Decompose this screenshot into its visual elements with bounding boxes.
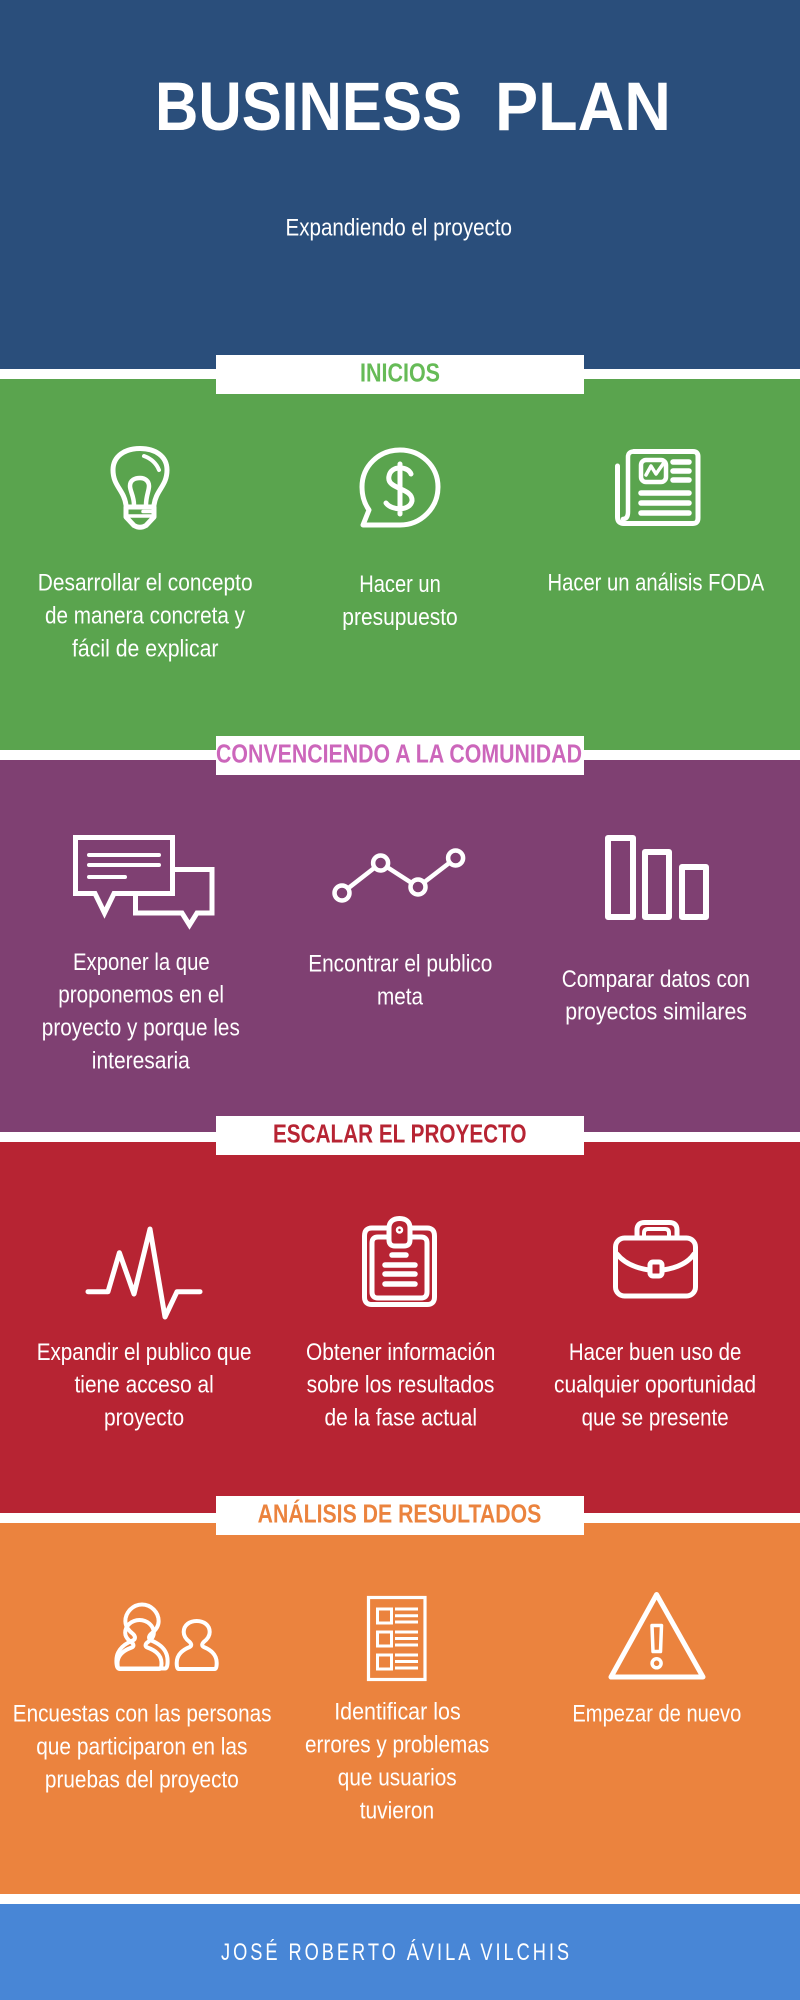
heading: analisis de resultados: ANÁLISIS DE RESULTADOS bbox=[258, 1500, 541, 1529]
text: SWOT analysis: Hacer un análisis FODA bbox=[548, 570, 764, 597]
panel: convenciendo a la comunidad bbox=[0, 736, 800, 1132]
subtitle: Expandiendo el proyecto bbox=[286, 214, 512, 242]
text: identify errors: tuvieron bbox=[360, 1798, 434, 1825]
text: surveys: que participaron en las bbox=[36, 1734, 248, 1761]
text: expose: proponemos en el bbox=[58, 982, 224, 1009]
text: concept: de manera concreta y bbox=[45, 603, 245, 630]
panel: analisis de resultados bbox=[0, 1496, 800, 1894]
text: surveys: pruebas del proyecto bbox=[45, 1767, 239, 1794]
title: PLAN bbox=[495, 68, 671, 145]
text: identify errors: que usuarios bbox=[338, 1765, 457, 1792]
icon: pulse line bbox=[88, 1229, 200, 1317]
icon: briefcase bbox=[616, 1222, 696, 1296]
icon: chat bubbles bbox=[76, 838, 212, 925]
text: target audience: meta bbox=[377, 983, 424, 1010]
text: get information: Obtener información bbox=[306, 1339, 495, 1366]
text: compare data bbox=[562, 966, 750, 1026]
icon: clipboard bbox=[364, 1218, 434, 1304]
text: concept: Desarrollar el concepto bbox=[38, 570, 253, 597]
text: expose: interesaria bbox=[92, 1048, 190, 1075]
text: identify errors: errores y problemas bbox=[305, 1732, 489, 1759]
text: budget bbox=[342, 571, 458, 631]
text: get information: sobre los resultados bbox=[307, 1372, 494, 1399]
icon: people bbox=[116, 1604, 217, 1669]
text: expand audience bbox=[37, 1339, 252, 1432]
text: identify errors bbox=[305, 1699, 489, 1825]
text: expose: proyecto y porque les bbox=[42, 1015, 240, 1042]
icon: newspaper bbox=[618, 452, 698, 524]
text: opportunity: cualquier oportunidad bbox=[554, 1372, 756, 1399]
text: expose bbox=[42, 949, 240, 1075]
text: identify errors: Identificar los bbox=[334, 1699, 461, 1726]
text: start over: Empezar de nuevo bbox=[572, 1701, 741, 1728]
icon: bar chart bbox=[608, 838, 706, 917]
text: target audience: Encontrar el publico bbox=[308, 951, 492, 978]
text: budget: presupuesto bbox=[342, 604, 458, 631]
icon: line chart bbox=[334, 850, 463, 900]
title bbox=[155, 68, 671, 145]
heading: escalar el proyecto bbox=[216, 1116, 584, 1155]
icon: checklist document bbox=[368, 1598, 425, 1680]
text: get information bbox=[306, 1339, 495, 1432]
heading: inicios: INICIOS bbox=[360, 360, 440, 388]
text: concept: fácil de explicar bbox=[72, 636, 218, 663]
text: opportunity: Hacer buen uso de bbox=[569, 1339, 741, 1366]
text: opportunity: que se presente bbox=[582, 1405, 729, 1432]
panel: escalar el proyecto bbox=[0, 1116, 800, 1513]
text: opportunity bbox=[554, 1339, 756, 1432]
text: surveys: Encuestas con las personas bbox=[13, 1701, 272, 1728]
icon: light bulb bbox=[113, 448, 167, 527]
panel: inicios bbox=[0, 355, 800, 750]
heading: analisis de resultados bbox=[216, 1496, 584, 1535]
heading: inicios bbox=[216, 355, 584, 394]
text: expand audience: Expandir el publico que bbox=[37, 1339, 252, 1366]
heading: convenciendo a la comunidad: CONVENCIENDO A LA COMUNIDAD bbox=[216, 740, 582, 768]
text: target audience bbox=[308, 951, 492, 1010]
text: concept bbox=[38, 570, 253, 663]
icon: dollar speech bubble bbox=[362, 450, 438, 525]
heading: escalar el proyecto: ESCALAR EL PROYECTO bbox=[273, 1121, 526, 1149]
text: budget: Hacer un bbox=[359, 571, 441, 598]
heading: convenciendo a la comunidad bbox=[216, 736, 584, 775]
text: get information: de la fase actual bbox=[324, 1405, 477, 1432]
icon: warning triangle bbox=[611, 1594, 703, 1677]
text: compare data: Comparar datos con bbox=[562, 966, 750, 993]
panel: footer bbox=[0, 1904, 800, 2000]
title: BUSINESS bbox=[155, 68, 462, 145]
text: compare data: proyectos similares bbox=[565, 999, 747, 1026]
text: expose: Exponer la que bbox=[73, 949, 210, 976]
footer author name: JOSÉ ROBERTO ÁVILA VILCHIS bbox=[221, 1937, 569, 1966]
panel: title banner bbox=[0, 0, 800, 369]
text: surveys bbox=[13, 1701, 272, 1794]
text: expand audience: tiene acceso al bbox=[74, 1372, 214, 1399]
text: expand audience: proyecto bbox=[104, 1405, 184, 1432]
